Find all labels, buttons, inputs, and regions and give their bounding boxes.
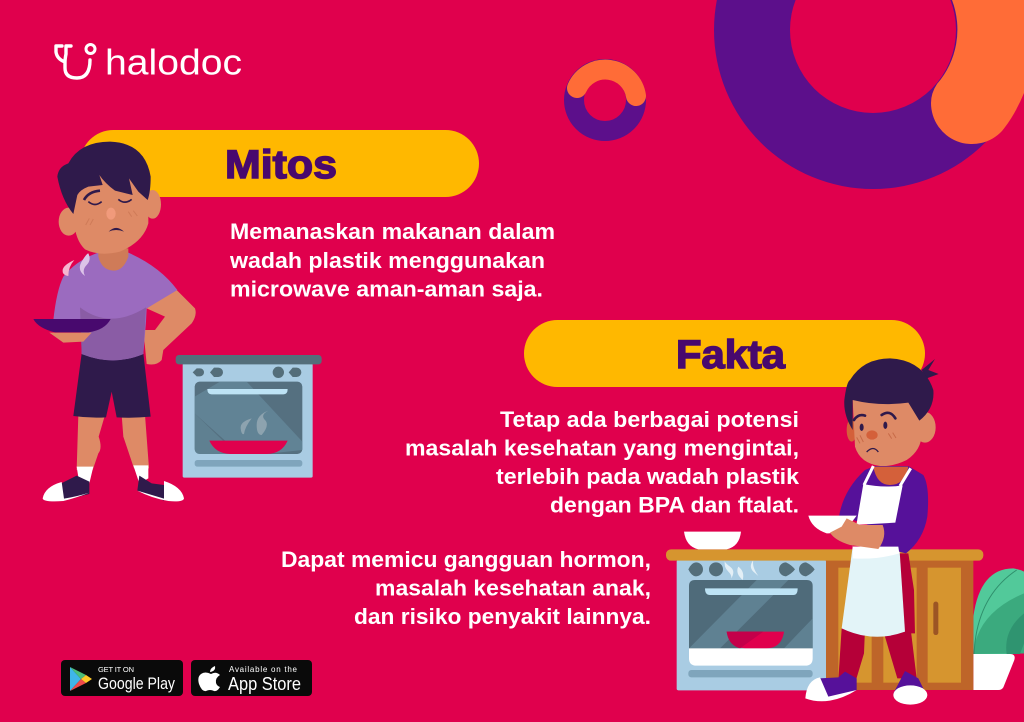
shorts (73, 353, 151, 418)
head (57, 142, 161, 271)
steam (63, 253, 90, 276)
badge: Google Play: Google Play (98, 675, 176, 693)
decoration: large purple and orange ring (714, 0, 1024, 189)
badge: Google Play (61, 660, 183, 696)
badge: App Store (191, 660, 312, 696)
torso and sleeves (839, 466, 928, 559)
text block: Fakta second paragraph (281, 547, 651, 629)
text block: Fakta first paragraph: dengan BPA dan ftalat. (550, 492, 799, 518)
text block: Mitos: wadah plastik menggunakan (229, 248, 545, 273)
legs (838, 553, 917, 680)
logo: halodoc (56, 42, 242, 82)
decoration: small donut (574, 69, 636, 131)
text block: Fakta first paragraph: terlebih pada wadah plastik (496, 464, 799, 489)
counter top and bowl (666, 532, 983, 561)
text block: Fakta second paragraph: dan risiko penyakit lainnya. (354, 604, 651, 629)
illustration: boy with plate and oven (33, 142, 322, 501)
illustration: boy cooking at kitchen counter (666, 358, 1024, 705)
arm (143, 290, 196, 364)
icon: plant and pot (973, 568, 1024, 690)
text block: Fakta second paragraph: Dapat memicu gangguan hormon, (281, 547, 651, 572)
cabinet (826, 560, 973, 690)
text block: Fakta first paragraph (405, 407, 799, 518)
text block: Fakta first paragraph: Tetap ada berbagai potensi (500, 407, 799, 432)
logo: halodoc: halodoc (105, 42, 242, 82)
text block: Fakta first paragraph: masalah kesehatan yang mengintai, (405, 436, 799, 460)
badge: App Store: App Store (228, 674, 301, 694)
badge: Google Play: GET IT ON (98, 665, 134, 674)
panel: Mitos heading pill: Mitos (225, 143, 337, 187)
icon: oven (677, 560, 826, 690)
shoes (805, 671, 927, 705)
hand and plate (33, 319, 111, 343)
shirt (53, 253, 177, 360)
text block: Mitos (229, 219, 555, 302)
panel: Fakta heading pill (524, 320, 925, 387)
head (844, 358, 939, 466)
legs and shoes (43, 415, 184, 501)
icon: oven (176, 355, 322, 478)
badge: App Store: Available on the (229, 665, 298, 674)
apron (842, 547, 905, 637)
text block: Fakta second paragraph: masalah kesehatan anak, (375, 576, 651, 600)
text block: Mitos: microwave aman-aman saja. (230, 276, 543, 302)
panel: Fakta heading pill: Fakta (676, 333, 786, 377)
panel: Mitos heading pill (80, 130, 479, 197)
text block: Mitos: Memanaskan makanan dalam (230, 219, 555, 244)
bowl and arm (808, 516, 884, 549)
